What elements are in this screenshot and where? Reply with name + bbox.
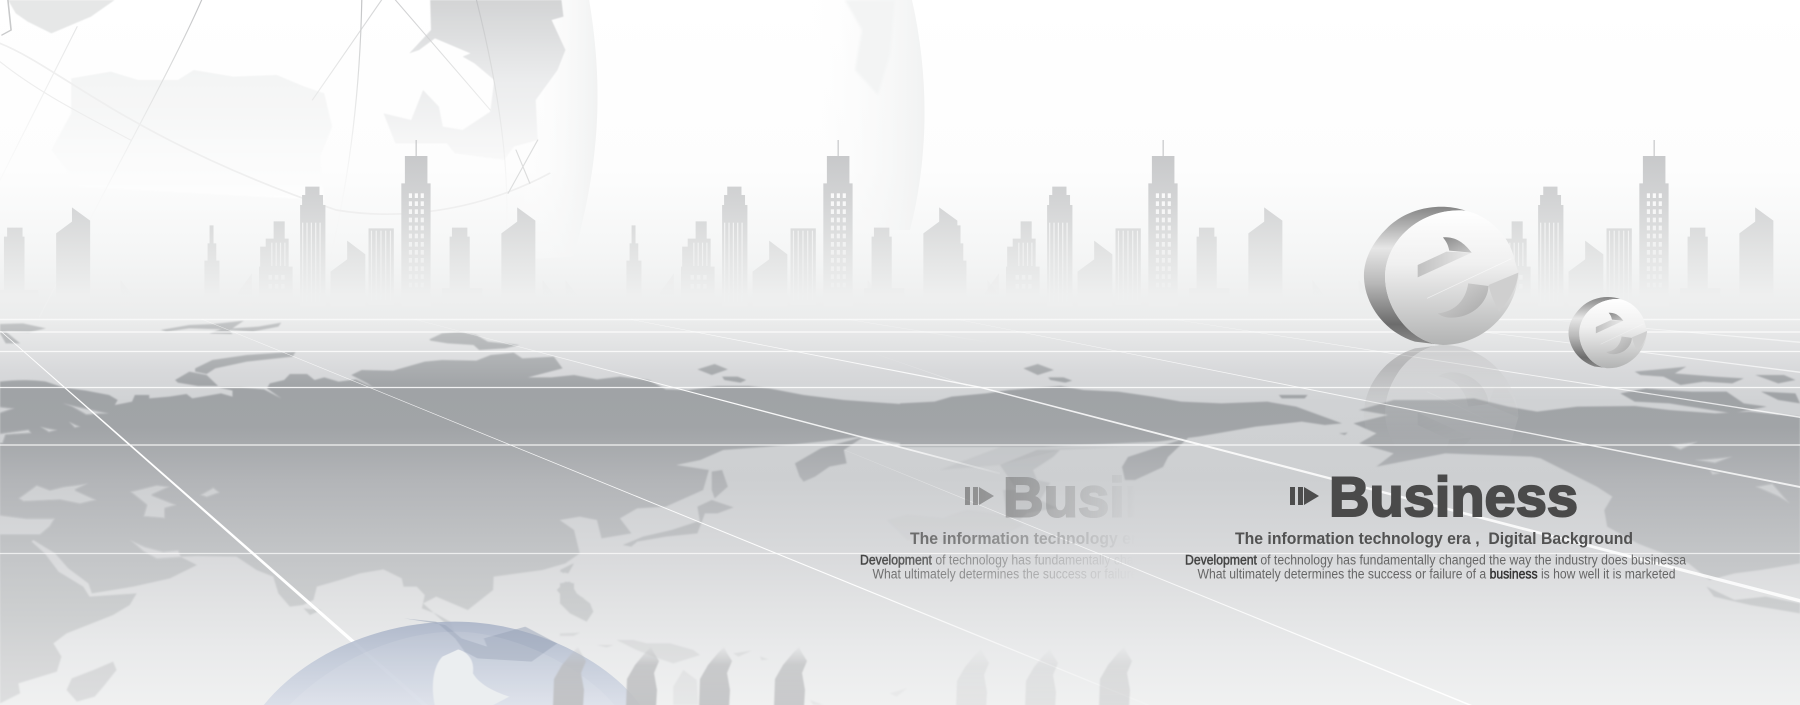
- large 3D e icon: [1364, 207, 1518, 345]
- body text: Development of technology has fundamentally changed the way the industry does businessa: [1185, 552, 1686, 567]
- globe halo edge: [514, 0, 598, 260]
- subtitle: The information technology era , Digital Background: [1235, 530, 1633, 548]
- large 3D e icon reflection: [1366, 345, 1518, 423]
- body text: What ultimately determines the success or failure of a business is how well it is marketed: [1198, 566, 1676, 581]
- globe white land: [433, 649, 509, 705]
- ghost arrow icon: [965, 487, 994, 505]
- ghost title: Business: [1003, 466, 1253, 528]
- globe: upper left with continents and grid arcs: [0, 0, 598, 317]
- small 3D e icon reflection: [1568, 490, 1647, 561]
- ghost subtitle: The information technology era , Digital Background: [910, 530, 1308, 548]
- globe continent: Eurasia: [51, 70, 332, 200]
- ghost globe: upper center: [800, 0, 925, 230]
- perspective grid lines: [0, 319, 1800, 705]
- ghost body text: What ultimately determines the success or failure of a business is how well it is marketed: [872, 566, 1350, 581]
- skyline: third group: [868, 140, 1324, 307]
- skyline: second group: [543, 140, 999, 307]
- globe continent: top left: [8, 0, 115, 33]
- body text: [1185, 552, 1686, 581]
- ghost body text: [860, 554, 1118, 582]
- skyline: first group with two extra buildings: [0, 140, 577, 307]
- world map: [0, 300, 1800, 705]
- skyline: fourth group: [1359, 140, 1800, 307]
- faded ghost text block: [860, 475, 1118, 582]
- globe light arc: [289, 632, 615, 705]
- horizon grid: horizontal lines: [0, 320, 1800, 554]
- title: Business: [1329, 465, 1578, 528]
- globe grid arcs: [0, 0, 550, 317]
- globe continent: Americas: [384, 0, 565, 160]
- bottom blue globe: [264, 618, 640, 705]
- small 3D e icon: [1568, 297, 1647, 368]
- standing figures: [553, 647, 1132, 705]
- arrow icon: [1290, 487, 1319, 505]
- main text block: [1185, 465, 1686, 581]
- globe land darker: [404, 618, 557, 662]
- ghost body text: Development of technology has fundamentally changed the way the industry does businessa: [860, 552, 1361, 567]
